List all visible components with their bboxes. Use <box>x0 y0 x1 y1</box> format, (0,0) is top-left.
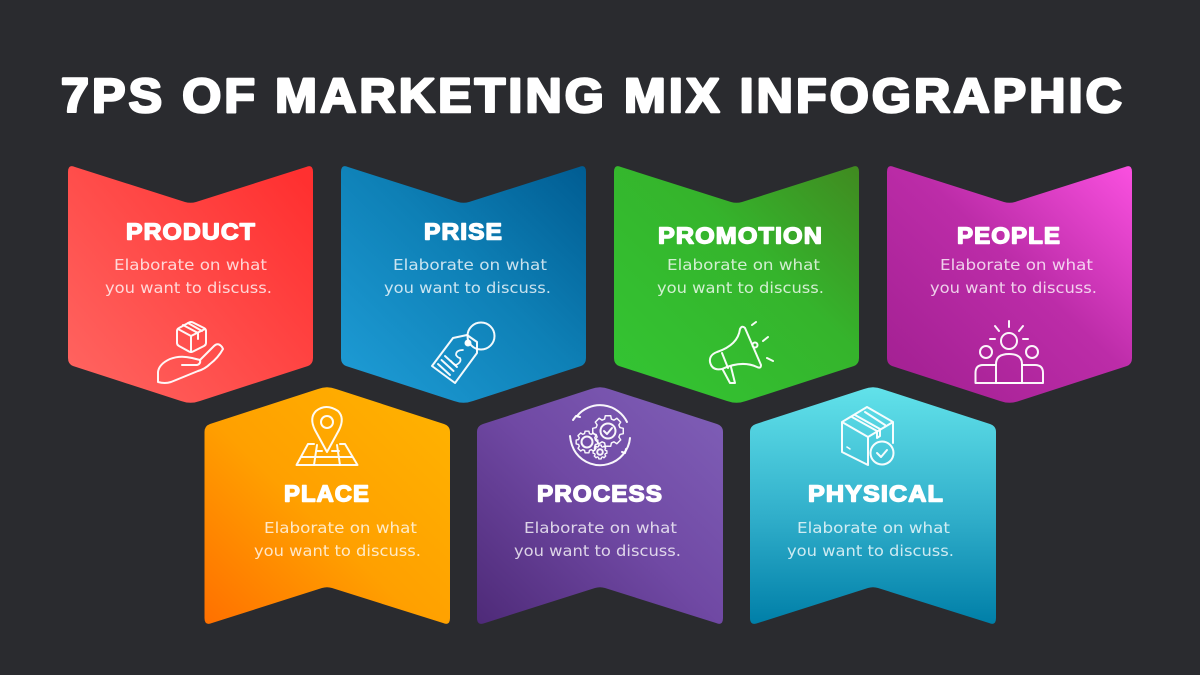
heading: physical: PHYSICAL <box>808 480 944 506</box>
icon: hand holding box <box>158 322 223 383</box>
icon: gears in cycle <box>570 405 630 465</box>
icon: megaphone <box>710 322 773 383</box>
text: physical description: you want to discuss. <box>787 542 954 560</box>
text: process description: you want to discuss. <box>514 542 681 560</box>
heading: promotion: PROMOTION <box>658 222 823 248</box>
panel: place <box>204 387 450 624</box>
heading: process: PROCESS <box>537 480 663 506</box>
text: product description: Elaborate on what <box>114 256 267 274</box>
icon: map pin <box>296 407 358 465</box>
text: product description: you want to discuss. <box>105 279 272 297</box>
panel: prise <box>341 166 586 403</box>
text: promotion description: Elaborate on what <box>667 256 820 274</box>
heading: people: PEOPLE <box>957 222 1061 248</box>
panel: people <box>887 166 1132 403</box>
heading: prise: PRISE <box>424 218 503 244</box>
icon: price tag <box>432 322 494 383</box>
text: place description: Elaborate on what <box>264 519 417 537</box>
panel: physical <box>750 387 996 624</box>
icon: people group <box>976 321 1043 383</box>
panel: promotion <box>614 166 859 403</box>
title: 7PS OF MARKETING MIX INFOGRAPHIC <box>61 70 1125 123</box>
icon: box with check <box>842 407 894 465</box>
panel: product <box>68 166 313 403</box>
heading: product: PRODUCT <box>126 218 256 244</box>
text: people description: you want to discuss. <box>930 279 1097 297</box>
text: people description: Elaborate on what <box>940 256 1093 274</box>
heading: place: PLACE <box>284 480 370 506</box>
text: place description: you want to discuss. <box>254 542 421 560</box>
text: prise description: you want to discuss. <box>384 279 551 297</box>
text: prise description: Elaborate on what <box>393 256 547 274</box>
panel: process <box>477 387 723 624</box>
text: physical description: Elaborate on what <box>797 519 950 537</box>
text: promotion description: you want to discuss. <box>657 279 824 297</box>
text: process description: Elaborate on what <box>524 519 677 537</box>
